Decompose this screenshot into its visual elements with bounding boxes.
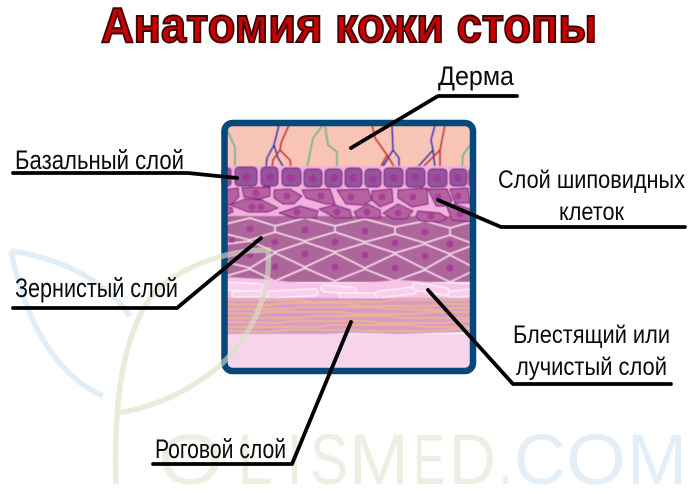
layered tissue (222, 125, 474, 371)
blood vessels and nerves (227, 125, 470, 168)
label: granular layer: Зернистый слой (15, 273, 178, 303)
panel frame (224, 123, 473, 371)
label: basal layer: Базальный слой (15, 145, 184, 175)
basal cell layer (222, 167, 474, 187)
background of spinous layer (226, 166, 471, 226)
label: granular layer (13, 238, 261, 308)
label: horny layer: Роговой слой (155, 434, 286, 464)
clear layer (226, 277, 474, 299)
watermark: site name (158, 421, 687, 494)
label: clear layer: Блестящий или (513, 321, 670, 349)
spinous cell layer (224, 187, 472, 222)
horny layer (226, 298, 471, 336)
label: horny layer (153, 322, 351, 464)
watermark: plant logo (11, 250, 268, 484)
logo: green stem and leaf (116, 250, 268, 484)
label: spinous layer (438, 166, 685, 227)
granular layer (226, 216, 471, 282)
label: clear layer (428, 290, 671, 384)
label: spinous layer: клеток (559, 198, 625, 226)
label: dermis (351, 61, 517, 148)
stratum corneum lower band (226, 334, 471, 371)
cell nuclei (229, 173, 464, 272)
panel: skin cross-section (222, 123, 474, 371)
label: dermis: Дерма (438, 61, 515, 91)
label: clear layer: лучистый слой (516, 353, 667, 381)
dermis layer (226, 125, 471, 170)
logo: blue leaf (11, 251, 130, 396)
title: Анатомия кожи стопы (101, 0, 597, 53)
